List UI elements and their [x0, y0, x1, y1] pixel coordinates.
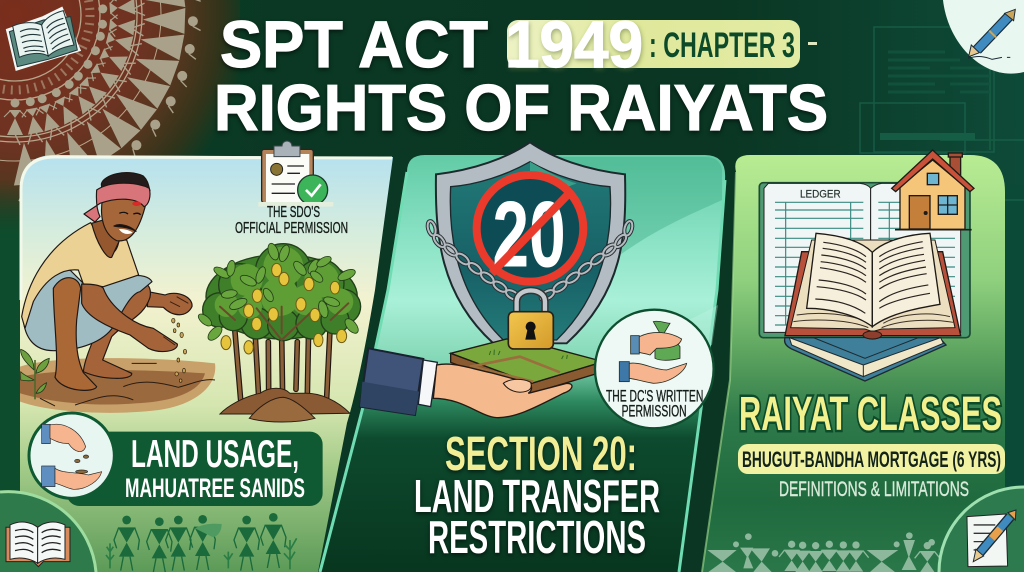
- illustration: ledger, house, books: [759, 150, 974, 381]
- label pill: land usage: [29, 413, 323, 506]
- warli figures: right: [707, 532, 940, 572]
- foliage: [203, 244, 360, 340]
- front arm: [82, 284, 177, 351]
- highlight pill: mortgage: [738, 444, 1005, 474]
- house: [892, 150, 974, 230]
- chain: [426, 220, 634, 302]
- icon badge: book bottom left: [0, 492, 96, 572]
- open book page stacks: [791, 240, 955, 332]
- dark soil: [20, 370, 205, 405]
- shield: [436, 142, 625, 343]
- hair: [101, 173, 150, 191]
- shirt: [22, 223, 139, 328]
- fruits: [221, 263, 347, 354]
- soil patch: [20, 358, 215, 413]
- ledger label: LEDGER: [800, 189, 841, 201]
- padlock: [517, 290, 545, 313]
- label: DC permission: [606, 387, 703, 421]
- dhoti: [23, 270, 152, 351]
- neck: [92, 220, 120, 257]
- sapling: [21, 349, 49, 399]
- rear thigh and leg: [83, 282, 150, 378]
- label: SDO permission: OFFICIAL PERMISSION: [235, 220, 348, 237]
- sleeve: [360, 348, 423, 415]
- land tile: [451, 353, 603, 393]
- background: faint ledger grid: [860, 27, 1024, 200]
- title: dash: [808, 42, 817, 45]
- title: rights of raiyats: RIGHTS OF RAIYATS: [214, 71, 828, 144]
- title: SPT ACT: SPT ACT: [220, 7, 488, 81]
- warli figures: left: [106, 513, 297, 572]
- label: DC permission: PERMISSION: [622, 402, 687, 421]
- heading: section 20: SECTION 20:: [445, 428, 637, 481]
- title: 1949: 1949: [505, 7, 643, 81]
- holding hand: [433, 364, 572, 418]
- callout: DC permission: [595, 310, 714, 428]
- icon: money bag exchange: [619, 321, 687, 383]
- front leg: [53, 278, 97, 390]
- bandana: [84, 183, 150, 222]
- illustration: soil, sapling and farmer: [20, 173, 215, 413]
- falling seeds: [172, 318, 187, 382]
- icon badge: note and pen bottom right: [939, 487, 1024, 572]
- open book pages: [807, 233, 872, 327]
- farmer: [22, 173, 192, 390]
- panel: raiyat classes: [702, 150, 1005, 572]
- shield inner: [450, 162, 611, 340]
- text: land transfer: LAND TRANSFER: [414, 470, 660, 522]
- prohibition sign: [477, 175, 583, 282]
- panel: section 20: [320, 142, 725, 572]
- background: warli mandala: [0, 0, 201, 201]
- number 20: 20: [492, 182, 566, 287]
- soil mounds: [220, 388, 350, 422]
- mustache and smile: [114, 225, 136, 231]
- text: land usage: LAND USAGE,: [131, 433, 299, 476]
- face: [102, 190, 148, 241]
- open book cover: [785, 252, 961, 339]
- icon: open book top left: [7, 8, 79, 69]
- icon: clipboard with check: [258, 141, 333, 207]
- cuff: [418, 360, 437, 407]
- trunks: [234, 317, 331, 400]
- title: [214, 7, 828, 144]
- leaves: [196, 242, 361, 343]
- ledger rules: [775, 202, 955, 325]
- title: chapter 3: : CHAPTER 3: [649, 26, 795, 65]
- ledger cover: [759, 183, 970, 338]
- soil cracks: [40, 363, 215, 406]
- illustration: shield, chain, lock, land: [360, 142, 634, 418]
- text: mahuatree sanids: MAHUATREE SANIDS: [125, 473, 305, 503]
- label: DC permission: THE DC'S WRITTEN: [606, 387, 703, 406]
- icon badge: pen top right: [943, 0, 1024, 74]
- title: year highlight pill: [507, 20, 800, 68]
- icon: seed hands: [42, 424, 102, 489]
- text: restrictions: RESTRICTIONS: [428, 511, 646, 563]
- slash: [492, 192, 571, 273]
- arm behind: [147, 292, 192, 315]
- ledger pages: [764, 183, 871, 332]
- label: SDO permission: THE SDO'S: [267, 204, 320, 221]
- lower closed book: [785, 338, 946, 381]
- branches: [220, 303, 348, 340]
- panel: land usage: [20, 141, 393, 572]
- illustration: mahua trees: [196, 242, 361, 422]
- label: SDO permission: [235, 204, 348, 237]
